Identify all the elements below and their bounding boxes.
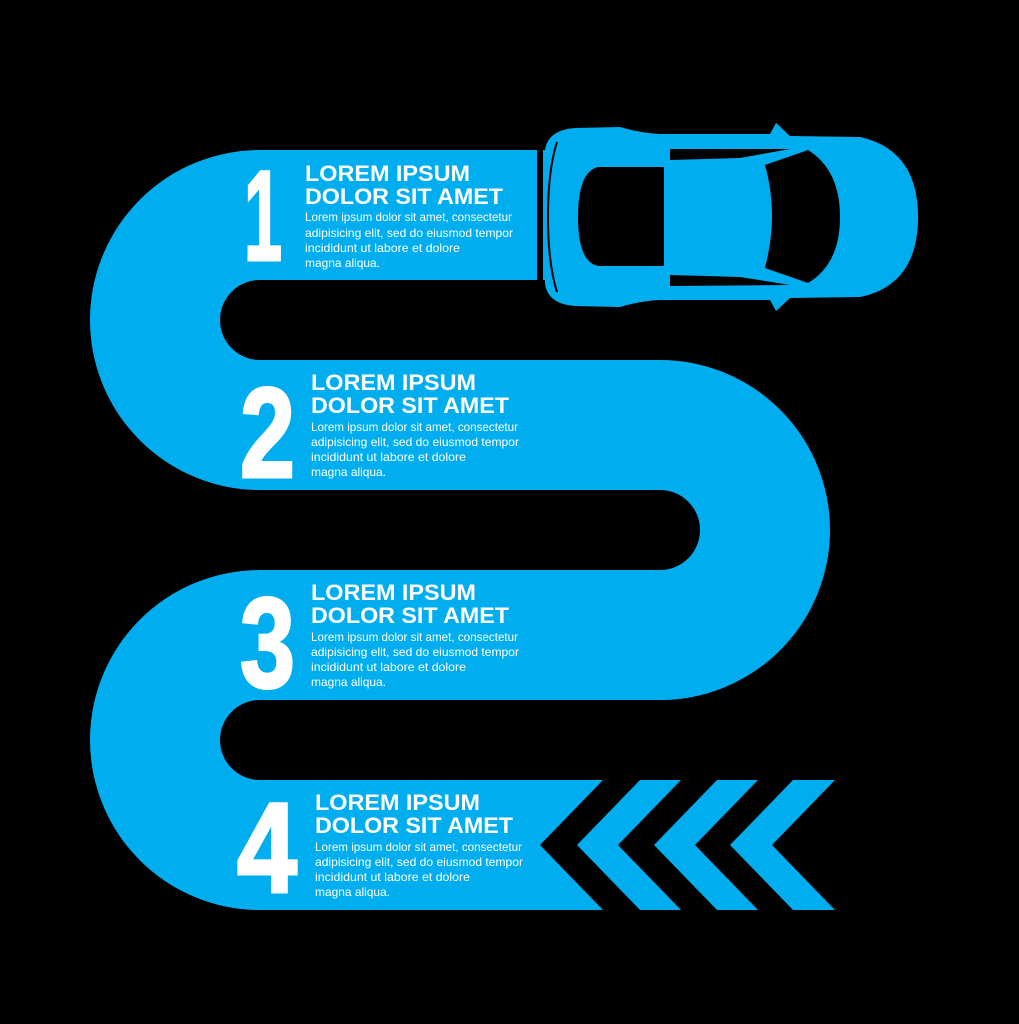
step 4: 4 bbox=[237, 777, 297, 920]
step 1: adipisicing elit, sed do eiusmod tempor bbox=[305, 226, 513, 240]
step 4: LOREM IPSUM bbox=[315, 790, 480, 815]
step 3: LOREM IPSUM bbox=[311, 580, 476, 605]
step 4: magna aliqua. bbox=[315, 885, 390, 899]
step 4: incididunt ut labore et dolore bbox=[315, 870, 470, 884]
step 4 bbox=[237, 777, 523, 920]
step 3: 3 bbox=[240, 572, 295, 715]
arrows: chevrons bbox=[577, 780, 835, 910]
step 3: magna aliqua. bbox=[311, 675, 386, 689]
step 2: magna aliqua. bbox=[311, 465, 386, 479]
road bbox=[155, 215, 860, 910]
step 1: 1 bbox=[244, 145, 282, 288]
step 4: DOLOR SIT AMET bbox=[315, 813, 514, 838]
step 3: adipisicing elit, sed do eiusmod tempor bbox=[311, 645, 519, 659]
step 1: DOLOR SIT AMET bbox=[305, 184, 504, 209]
step 2: DOLOR SIT AMET bbox=[311, 393, 510, 418]
step 4: adipisicing elit, sed do eiusmod tempor bbox=[315, 855, 523, 869]
step 2 bbox=[240, 362, 519, 505]
step 1: incididunt ut labore et dolore bbox=[305, 241, 460, 255]
step 3: incididunt ut labore et dolore bbox=[311, 660, 466, 674]
step 1: LOREM IPSUM bbox=[305, 161, 470, 186]
step 3: DOLOR SIT AMET bbox=[311, 603, 510, 628]
step 3: Lorem ipsum dolor sit amet, consectetur bbox=[311, 630, 518, 644]
step 1 bbox=[244, 145, 513, 288]
step 4: Lorem ipsum dolor sit amet, consectetur bbox=[315, 840, 522, 854]
step 2: Lorem ipsum dolor sit amet, consectetur bbox=[311, 420, 518, 434]
step 1: magna aliqua. bbox=[305, 256, 380, 270]
icon: car bbox=[537, 123, 918, 311]
step 2: 2 bbox=[240, 362, 295, 505]
step 3 bbox=[240, 572, 519, 715]
step 2: LOREM IPSUM bbox=[311, 370, 476, 395]
step 2: adipisicing elit, sed do eiusmod tempor bbox=[311, 435, 519, 449]
step 2: incididunt ut labore et dolore bbox=[311, 450, 466, 464]
step 1: Lorem ipsum dolor sit amet, consectetur bbox=[305, 210, 512, 224]
